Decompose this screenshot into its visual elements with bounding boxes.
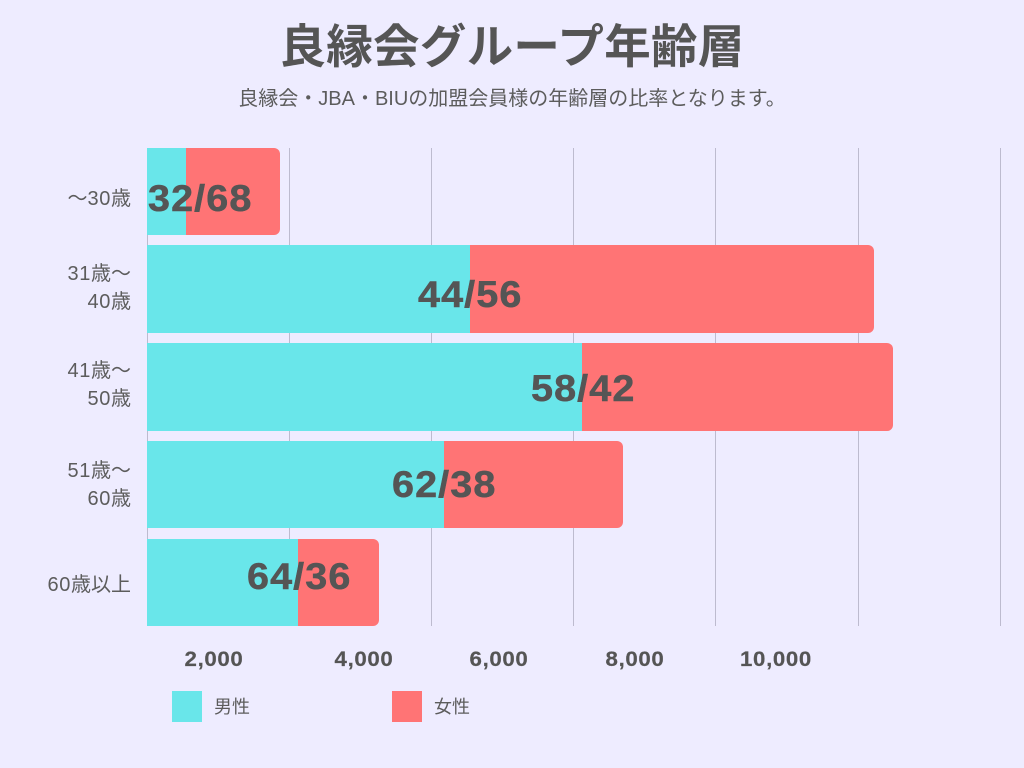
row label: 51 to 60: 60歳 [88,488,131,510]
value: 32/68: 32/68 [148,178,252,219]
legend swatch: female [392,691,422,722]
value: 58/42: 58/42 [531,368,635,409]
bar: over 60 female [298,539,379,626]
subtitle: 良縁会・JBA・BIUの加盟会員様の年齢層の比率となります。 [238,88,786,110]
row label: 41 to 50: 50歳 [88,388,131,410]
bar: up to 30 male [147,148,186,235]
row label: up to 30: ～30歳 [68,188,131,210]
row label: 31 to 40 [68,263,131,313]
row label: 31 to 40: 40歳 [88,291,131,313]
legend swatch: male [172,691,202,722]
value: 62/38: 62/38 [392,464,496,505]
row label: 51 to 60: 51歳～ [68,460,131,482]
bar: 51-60 female [444,441,623,528]
bar: over 60 male [147,539,298,626]
axis label: 6,000: 6,000 [470,648,528,671]
legend label: female: 女性 [434,697,470,717]
axis label: 2,000: 2,000 [185,648,243,671]
row label: 41 to 50 [68,360,131,410]
row label: 41 to 50: 41歳～ [68,360,131,382]
value: 44/56: 44/56 [418,274,522,315]
legend [172,691,470,722]
bar: 41-50 female [582,343,893,430]
value: 64/36: 64/36 [247,556,351,597]
bar: 51-60 male [147,441,444,528]
axis label: 8,000: 8,000 [606,648,664,671]
bar: 41-50 male [147,343,582,430]
bar: 31-40 female [470,245,874,333]
row label: over 60: 60歳以上 [48,574,131,596]
title: 良縁会グループ年齢層 [279,21,745,73]
row label: 51 to 60 [68,460,131,510]
bar: up to 30 female [186,148,280,235]
row label: 31 to 40: 31歳～ [68,263,131,285]
bar: 31-40 male [147,245,470,333]
legend label: male: 男性 [214,697,250,717]
axis label: 10,000: 10,000 [740,648,812,671]
axis label: 4,000: 4,000 [335,648,393,671]
